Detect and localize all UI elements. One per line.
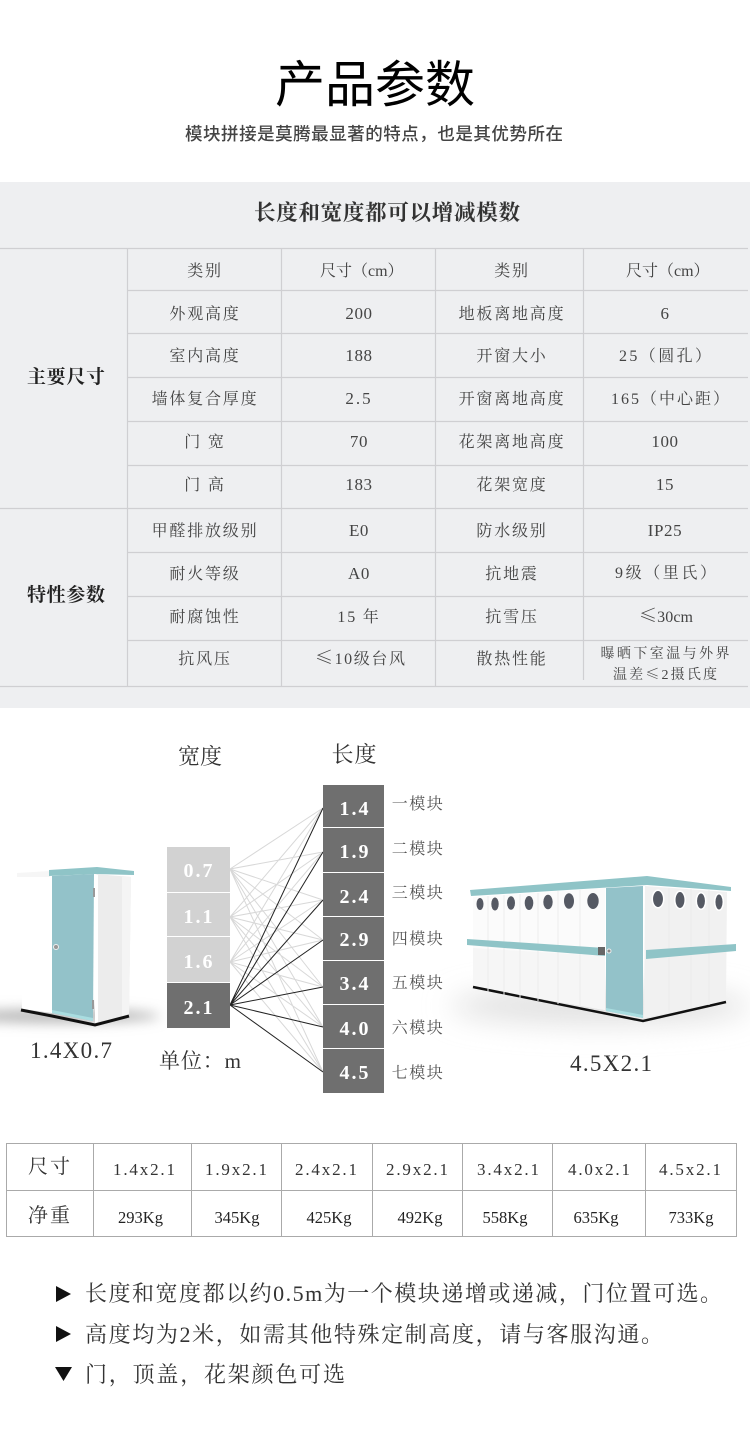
length boxes [323, 785, 384, 1093]
table rows: main dimensions: 外观高度 [169, 304, 241, 323]
heading: length: 长度 [332, 742, 376, 767]
weight table [6, 1143, 737, 1237]
width boxes: 2.1 [184, 997, 214, 1019]
table rows: main dimensions: 类别 [187, 262, 223, 280]
table rows: main dimensions: 183 [345, 475, 373, 494]
length boxes: 3.4 [340, 973, 370, 995]
table rows: main dimensions: 200 [345, 304, 373, 323]
weight table: 1.9x2.1 [205, 1160, 267, 1179]
table rows: characteristic parameters: ≤30cm [639, 602, 694, 628]
weight table: 4.5x2.1 [659, 1160, 721, 1179]
table rows: characteristic parameters: A0 [348, 564, 370, 583]
subtitle: 模块拼接是莫腾最显著的特点，也是其优势所在 [185, 124, 563, 144]
length boxes: 2.9 [340, 929, 370, 951]
table rows: main dimensions: 165（中心距） [611, 390, 731, 408]
module labels: 五模块 [392, 973, 444, 992]
module labels: 三模块 [392, 883, 444, 902]
table rows: main dimensions: 花架离地高度 [459, 432, 565, 451]
table rows: main dimensions: 6 [660, 304, 670, 323]
weight table: 3.4x2.1 [477, 1160, 539, 1179]
table rows: characteristic parameters: 温差≤2摄氏度 [613, 664, 717, 684]
table rows: main dimensions: 25（圆孔） [619, 347, 713, 365]
table rows: characteristic parameters: ≤10级台风 [315, 644, 405, 670]
table rows: characteristic parameters: E0 [349, 521, 369, 540]
module labels: 二模块 [392, 839, 444, 858]
table rows: main dimensions: 2.5 [345, 389, 373, 408]
weight table: 345Kg [214, 1208, 260, 1227]
connector lines [230, 808, 323, 1072]
weight table: 733Kg [668, 1208, 714, 1227]
note 2: 高度均为2米，如需其他特殊定制高度，请与客服沟通。 [85, 1322, 663, 1348]
table rows: main dimensions: 花架宽度 [476, 475, 548, 494]
length boxes: 2.4 [340, 886, 370, 908]
length boxes: 1.4 [340, 798, 370, 820]
weight table: 净重 [28, 1204, 70, 1227]
length boxes: 4.5 [340, 1062, 370, 1084]
weight table: 1.4x2.1 [113, 1160, 175, 1179]
weight table: 2.4x2.1 [295, 1160, 357, 1179]
table rows: characteristic parameters: 耐腐蚀性 [169, 607, 241, 626]
table rows: main dimensions: 室内高度 [169, 346, 241, 365]
weight table: 425Kg [306, 1208, 352, 1227]
table rows: main dimensions: 门 宽 [184, 433, 226, 451]
module labels [392, 794, 444, 1082]
note 1: 长度和宽度都以约0.5m为一个模块递增或递减，门位置可选。 [85, 1281, 722, 1307]
table rows: main dimensions: 188 [345, 346, 373, 365]
illustration: large shed 4.5x2.1 [467, 876, 736, 1021]
table rows: main dimensions: 门 高 [184, 475, 226, 494]
length boxes: 4.0 [340, 1018, 370, 1040]
weight table: 2.9x2.1 [386, 1160, 448, 1179]
table rows: main dimensions: 15 [656, 475, 674, 494]
table rows: characteristic parameters: 9级（里氏） [615, 564, 719, 582]
section label: main dimensions: 主要尺寸 [27, 366, 105, 388]
table heading: 长度和宽度都可以增减模数 [254, 201, 520, 225]
heading: width: 宽度 [178, 744, 222, 769]
length boxes: 1.9 [340, 841, 370, 863]
table rows: characteristic parameters: 抗地震 [485, 564, 539, 583]
table rows: main dimensions: 100 [651, 432, 679, 451]
table rows: characteristic parameters: 甲醛排放级别 [152, 522, 258, 540]
table rows: main dimensions: 70 [350, 432, 368, 451]
table rows: main dimensions: 类别 [494, 262, 530, 280]
shed shadows [0, 988, 750, 1024]
weight table: 尺寸 [28, 1155, 70, 1178]
width boxes [167, 847, 230, 1028]
panel: parameter table [0, 182, 750, 708]
caption: small shed size: 1.4X0.7 [30, 1038, 112, 1063]
caption: large shed size: 4.5X2.1 [570, 1051, 652, 1076]
note 3: 门，顶盖，花架颜色可选 [85, 1362, 345, 1388]
table rows: main dimensions: 开窗大小 [476, 347, 548, 365]
table rows: main dimensions: 尺寸（cm） [320, 262, 404, 280]
module labels: 六模块 [392, 1018, 444, 1037]
table rows: characteristic parameters: 耐火等级 [169, 565, 241, 583]
table rows: main dimensions: 地板离地高度 [459, 304, 565, 323]
unit label: 单位：m [159, 1049, 241, 1073]
table rows: main dimensions: 墙体复合厚度 [152, 390, 258, 408]
table rows: main dimensions [152, 262, 731, 494]
title: 产品参数 [275, 57, 475, 113]
weight table: 4.0x2.1 [568, 1160, 630, 1179]
table rows: characteristic parameters: 曝晒下室温与外界 [600, 646, 730, 662]
table rows: main dimensions: 尺寸（cm） [626, 262, 710, 280]
module labels: 一模块 [392, 794, 444, 813]
width boxes: 1.1 [184, 906, 214, 928]
table rows: characteristic parameters: 防水级别 [476, 522, 548, 540]
weight table: 492Kg [398, 1208, 443, 1227]
module labels: 四模块 [392, 929, 444, 948]
weight table: 293Kg [118, 1208, 163, 1227]
table rows: characteristic parameters [152, 521, 730, 684]
table rows: characteristic parameters: 抗雪压 [485, 608, 539, 626]
module labels: 七模块 [392, 1063, 444, 1082]
width boxes: 1.6 [184, 951, 214, 973]
table rows: characteristic parameters: 抗风压 [178, 650, 232, 668]
width boxes: 0.7 [184, 860, 214, 882]
section label: characteristic parameters: 特性参数 [27, 584, 105, 606]
table rows: main dimensions: 开窗离地高度 [459, 389, 565, 408]
weight table: 635Kg [574, 1208, 619, 1227]
weight table: 558Kg [482, 1208, 528, 1227]
table rows: characteristic parameters: 15 年 [337, 607, 381, 626]
table rows: characteristic parameters: IP25 [648, 521, 682, 540]
illustration: small shed 1.4x0.7 [17, 867, 134, 1025]
table rows: characteristic parameters: 散热性能 [476, 650, 548, 668]
